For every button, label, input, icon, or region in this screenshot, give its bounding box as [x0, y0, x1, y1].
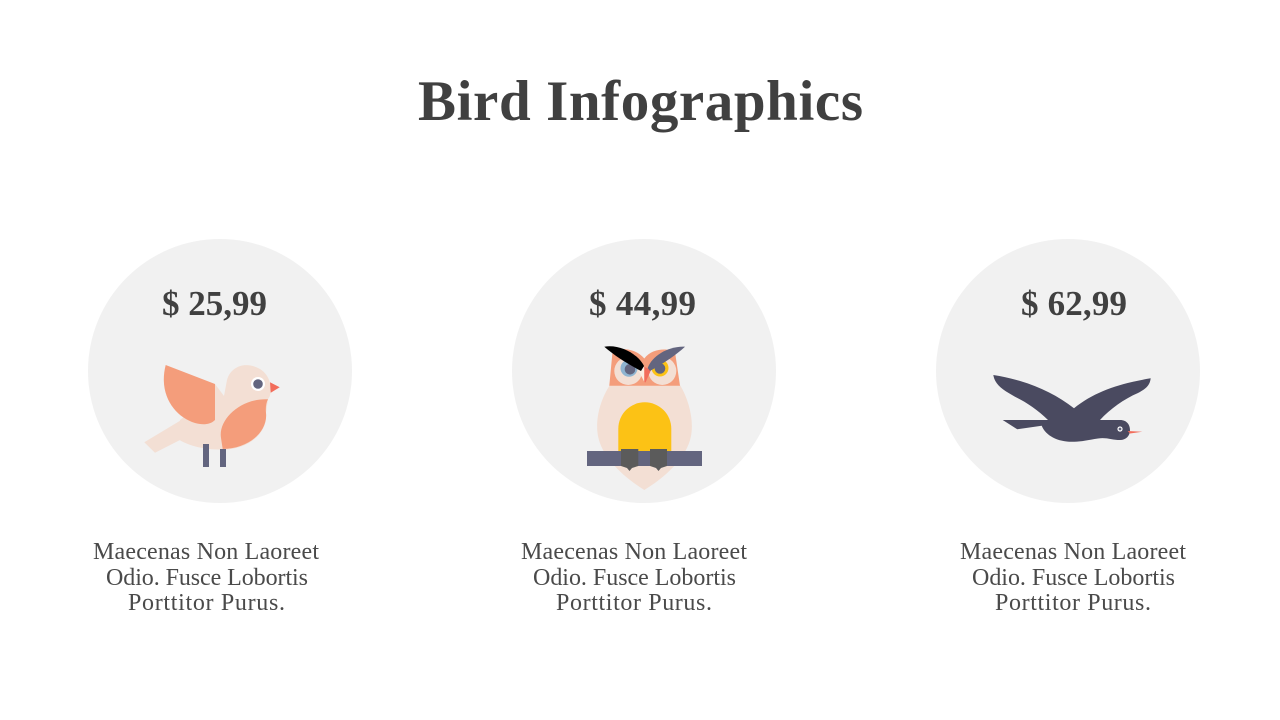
- circle background 3: [936, 239, 1200, 503]
- description 2: Maecenas Non Laoreet: [521, 539, 747, 565]
- description 1: Odio. Fusce Lobortis: [106, 565, 308, 591]
- icon: flying dark bird: [993, 375, 1151, 442]
- circle background 1: [88, 239, 352, 503]
- description 2: Porttitor Purus.: [556, 590, 712, 616]
- panel: first bird: [88, 239, 352, 616]
- description 1: Porttitor Purus.: [128, 590, 285, 616]
- panel: flying bird: [936, 239, 1200, 616]
- price 1: $ 25,99: [162, 284, 267, 323]
- description 3: [960, 539, 1186, 616]
- icon: small peach bird: [144, 365, 280, 467]
- description 2: Odio. Fusce Lobortis: [533, 565, 736, 591]
- circle background 2: [512, 239, 776, 503]
- description 2: [521, 539, 747, 616]
- title: Bird Infographics: [418, 70, 863, 133]
- description 1: [93, 539, 319, 616]
- description 1: Maecenas Non Laoreet: [93, 539, 319, 565]
- icon: owl on perch: [587, 346, 702, 490]
- description 3: Maecenas Non Laoreet: [960, 539, 1186, 565]
- price 2: $ 44,99: [589, 284, 696, 323]
- price 3: $ 62,99: [1021, 284, 1127, 323]
- description 3: Porttitor Purus.: [995, 590, 1151, 616]
- panel: owl: [512, 239, 776, 616]
- description 3: Odio. Fusce Lobortis: [972, 565, 1175, 591]
